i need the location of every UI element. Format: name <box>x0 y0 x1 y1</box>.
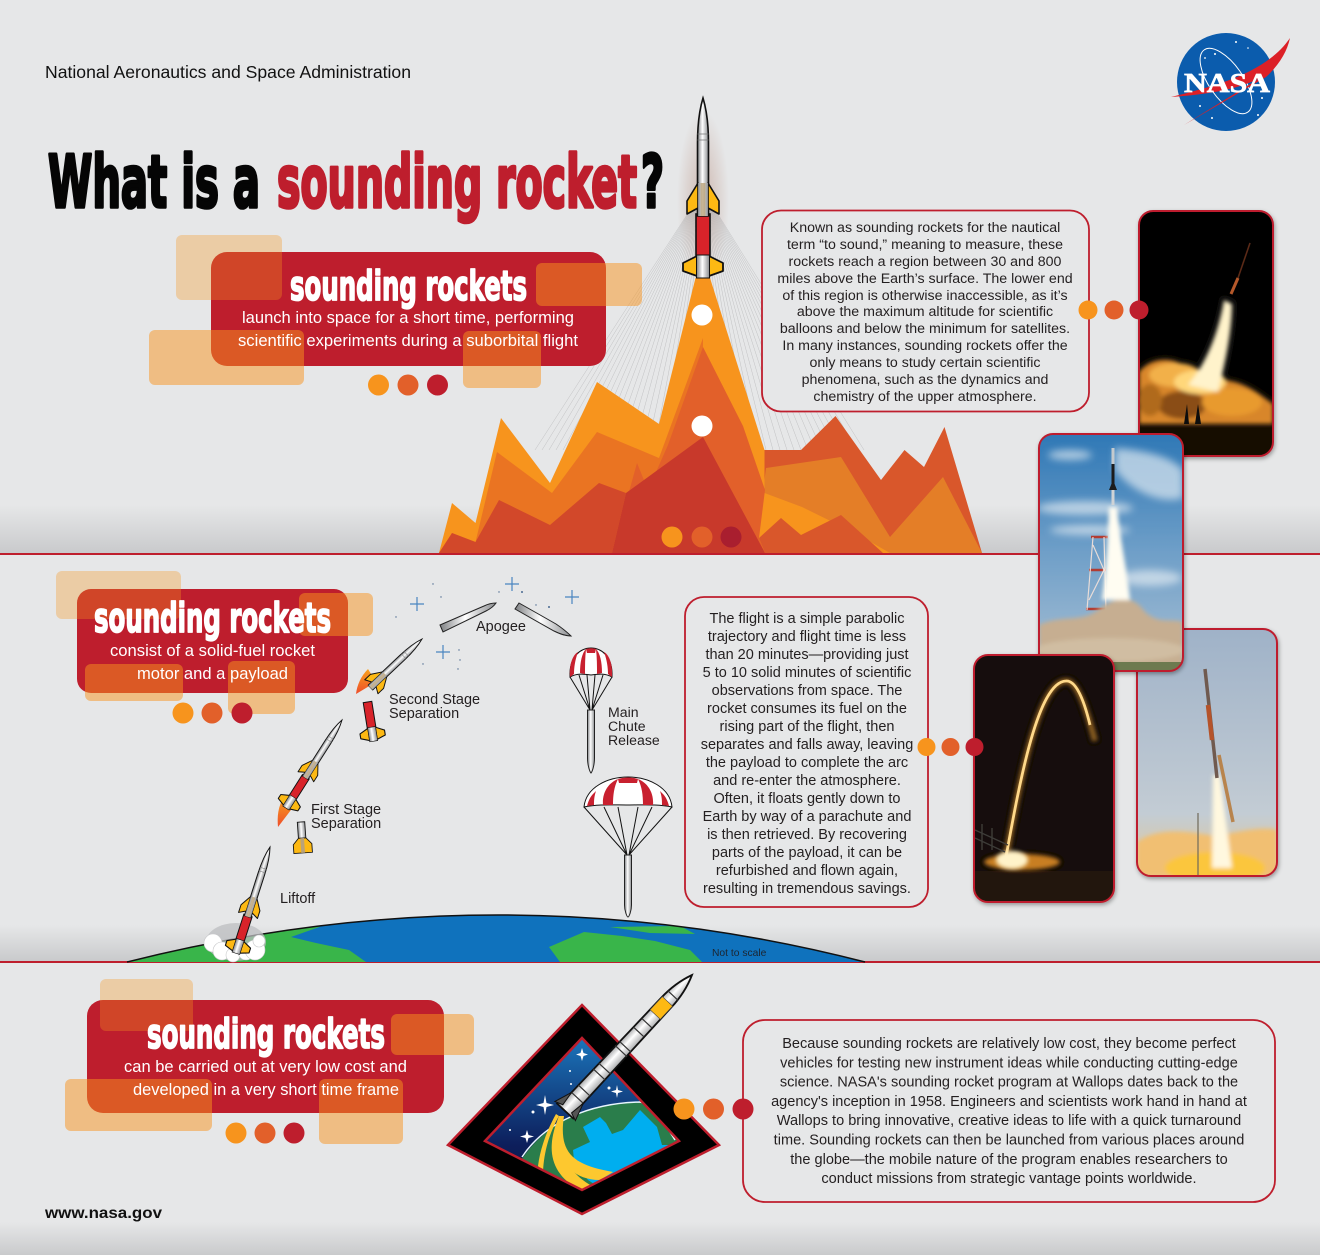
photo: night launch fireball <box>1138 211 1273 456</box>
text block: value <box>743 1020 1275 1202</box>
cost text: can be carried out at very low cost and <box>124 1057 407 1076</box>
payload at apogee <box>440 603 571 636</box>
text block: value: agency's inception in 1958. Engineers and scientists work hand in hand at <box>771 1094 1247 1110</box>
text block: value: Wallops to bring innovative, creative ideas to life with a quick turnaround <box>777 1113 1241 1129</box>
components heading: sounding rockets <box>94 594 331 642</box>
red divider 2 <box>0 961 1320 963</box>
text block: flight: separates and falls away, leaving <box>701 737 913 753</box>
cost text <box>124 1057 407 1099</box>
text block: value: conduct missions from strategic vantage points worldwide. <box>821 1171 1197 1187</box>
text block: value: vehicles for testing new instrument ideas while conducting cutting-edge <box>780 1055 1238 1071</box>
NASA logo <box>1171 33 1290 131</box>
text block: definition: rockets reach a region between 30 and 800 <box>789 254 1062 270</box>
spent booster 2 <box>355 700 386 743</box>
dots under cost callout <box>226 1122 304 1144</box>
components text <box>110 641 315 683</box>
main rocket <box>683 98 723 278</box>
callout text: launch into space for a short time, performing <box>242 308 574 327</box>
flame mountains <box>439 278 982 553</box>
text block: value: Because sounding rockets are relatively low cost, they become perfect <box>782 1036 1236 1052</box>
cost text: developed in a very short time frame <box>133 1080 399 1099</box>
photo: launch at sunrise <box>1137 629 1277 884</box>
dots to arc photo <box>918 738 984 756</box>
flight labels: Main <box>608 704 639 720</box>
text block: definition: phenomena, such as the dynamics and <box>802 372 1048 388</box>
footer url: www.nasa.gov <box>44 1205 162 1222</box>
stars <box>395 577 579 670</box>
NASA logo: NASA <box>1184 68 1271 98</box>
text block: definition: miles above the Earth’s surface. The lower end <box>777 271 1073 287</box>
spent booster 1 <box>292 821 312 854</box>
mission patch <box>448 965 719 1214</box>
flight labels: Chute <box>608 718 646 734</box>
callout text <box>238 308 578 350</box>
text block: definition: of this region is otherwise inaccessible, as it’s <box>782 288 1068 304</box>
flight labels: Separation <box>389 706 459 722</box>
radiating lines behind rocket <box>535 110 864 450</box>
text block: flight: rocket consumes its fuel on the <box>707 701 907 717</box>
flight labels: First Stage <box>311 802 381 818</box>
text block: flight: and re-enter the atmosphere. <box>713 773 901 789</box>
flame markers <box>692 304 712 436</box>
title: sounding rocket <box>277 140 637 224</box>
callout heading: sounding rockets <box>290 262 527 310</box>
flight labels: Separation <box>311 816 381 832</box>
text block: flight <box>685 597 928 907</box>
title <box>48 140 664 224</box>
flight labels: Liftoff <box>280 891 316 907</box>
text block: definition: only means to study certain scientific <box>809 355 1041 371</box>
smoke cloud <box>204 923 266 962</box>
photo: daytime launch <box>1035 434 1185 671</box>
text block: definition: above the maximum altitude for scientific <box>797 304 1053 320</box>
text block: value: the globe—the mobile nature of the program enables researchers to <box>790 1152 1228 1168</box>
text block: definition: chemistry of the upper atmosphere. <box>813 389 1037 405</box>
note: not to scale: Not to scale <box>712 948 767 959</box>
text block: flight: than 20 minutes—providing just <box>705 647 909 663</box>
text block: definition <box>762 210 1089 412</box>
rocket: liftoff <box>224 843 282 957</box>
dots to photo <box>1078 300 1148 320</box>
components text: consist of a solid-fuel rocket <box>110 641 315 660</box>
text block: flight: is then retrieved. By recovering <box>707 827 907 843</box>
red divider 1 <box>0 553 1320 555</box>
text block: definition: In many instances, sounding rockets offer the <box>782 338 1068 354</box>
flight labels: Second Stage <box>389 692 480 708</box>
earth <box>120 915 865 962</box>
text block: definition: term “to sound,” meaning to measure, these <box>787 237 1063 253</box>
rocket: first stage separation <box>276 714 352 827</box>
header: agency name: National Aeronautics and Space Administration <box>45 62 411 82</box>
parachute: deployment <box>570 648 612 773</box>
text block: flight: 5 to 10 solid minutes of scientific <box>703 665 911 681</box>
text block: flight: Earth by way of a parachute and <box>703 809 911 825</box>
patch rocket <box>555 965 702 1121</box>
text block: flight: refurbished and flown again, <box>716 863 898 879</box>
text block: definition: balloons and below the minimum for satellites. <box>780 321 1070 337</box>
panel: launch callout <box>149 235 642 388</box>
text block: value: science. NASA's sounding rocket program at Wallops dates back to the <box>780 1075 1238 1091</box>
text block: flight: the payload to complete the arc <box>706 755 908 771</box>
title: What is a <box>48 140 260 224</box>
panel: components callout <box>56 571 373 714</box>
text block: definition: Known as sounding rockets for the nautical <box>790 220 1060 236</box>
dots to value text <box>674 1098 754 1120</box>
title: ? <box>641 140 664 224</box>
flight labels: Apogee <box>476 619 526 635</box>
dots under components callout <box>172 702 252 724</box>
text block: value: time. Sounding rockets can then be launched from various places around <box>774 1132 1244 1148</box>
dots on flame <box>662 526 742 548</box>
text block: flight: resulting in tremendous savings. <box>703 881 911 897</box>
text block: flight: Often, it floats gently down to <box>714 791 900 807</box>
dots under launch callout <box>368 374 448 396</box>
parachute: descent <box>584 777 672 917</box>
photo: long-exposure arc <box>974 655 1114 902</box>
flight labels <box>280 619 660 907</box>
panel: cost callout <box>65 979 474 1144</box>
callout text: scientific experiments during a suborbital flight <box>238 331 578 350</box>
flight labels: Release <box>608 732 660 748</box>
text block: flight: rising part of the flight, then <box>720 719 894 735</box>
cost heading: sounding rockets <box>147 1010 385 1058</box>
text block: flight: parts of the payload, it can be <box>712 845 902 861</box>
components text: motor and a payload <box>137 664 288 683</box>
rocket: second stage separation <box>356 632 429 695</box>
text block: flight: observations from space. The <box>712 683 902 699</box>
text block: flight: The flight is a simple parabolic <box>709 611 905 627</box>
text block: flight: trajectory and flight time is less <box>708 629 906 645</box>
